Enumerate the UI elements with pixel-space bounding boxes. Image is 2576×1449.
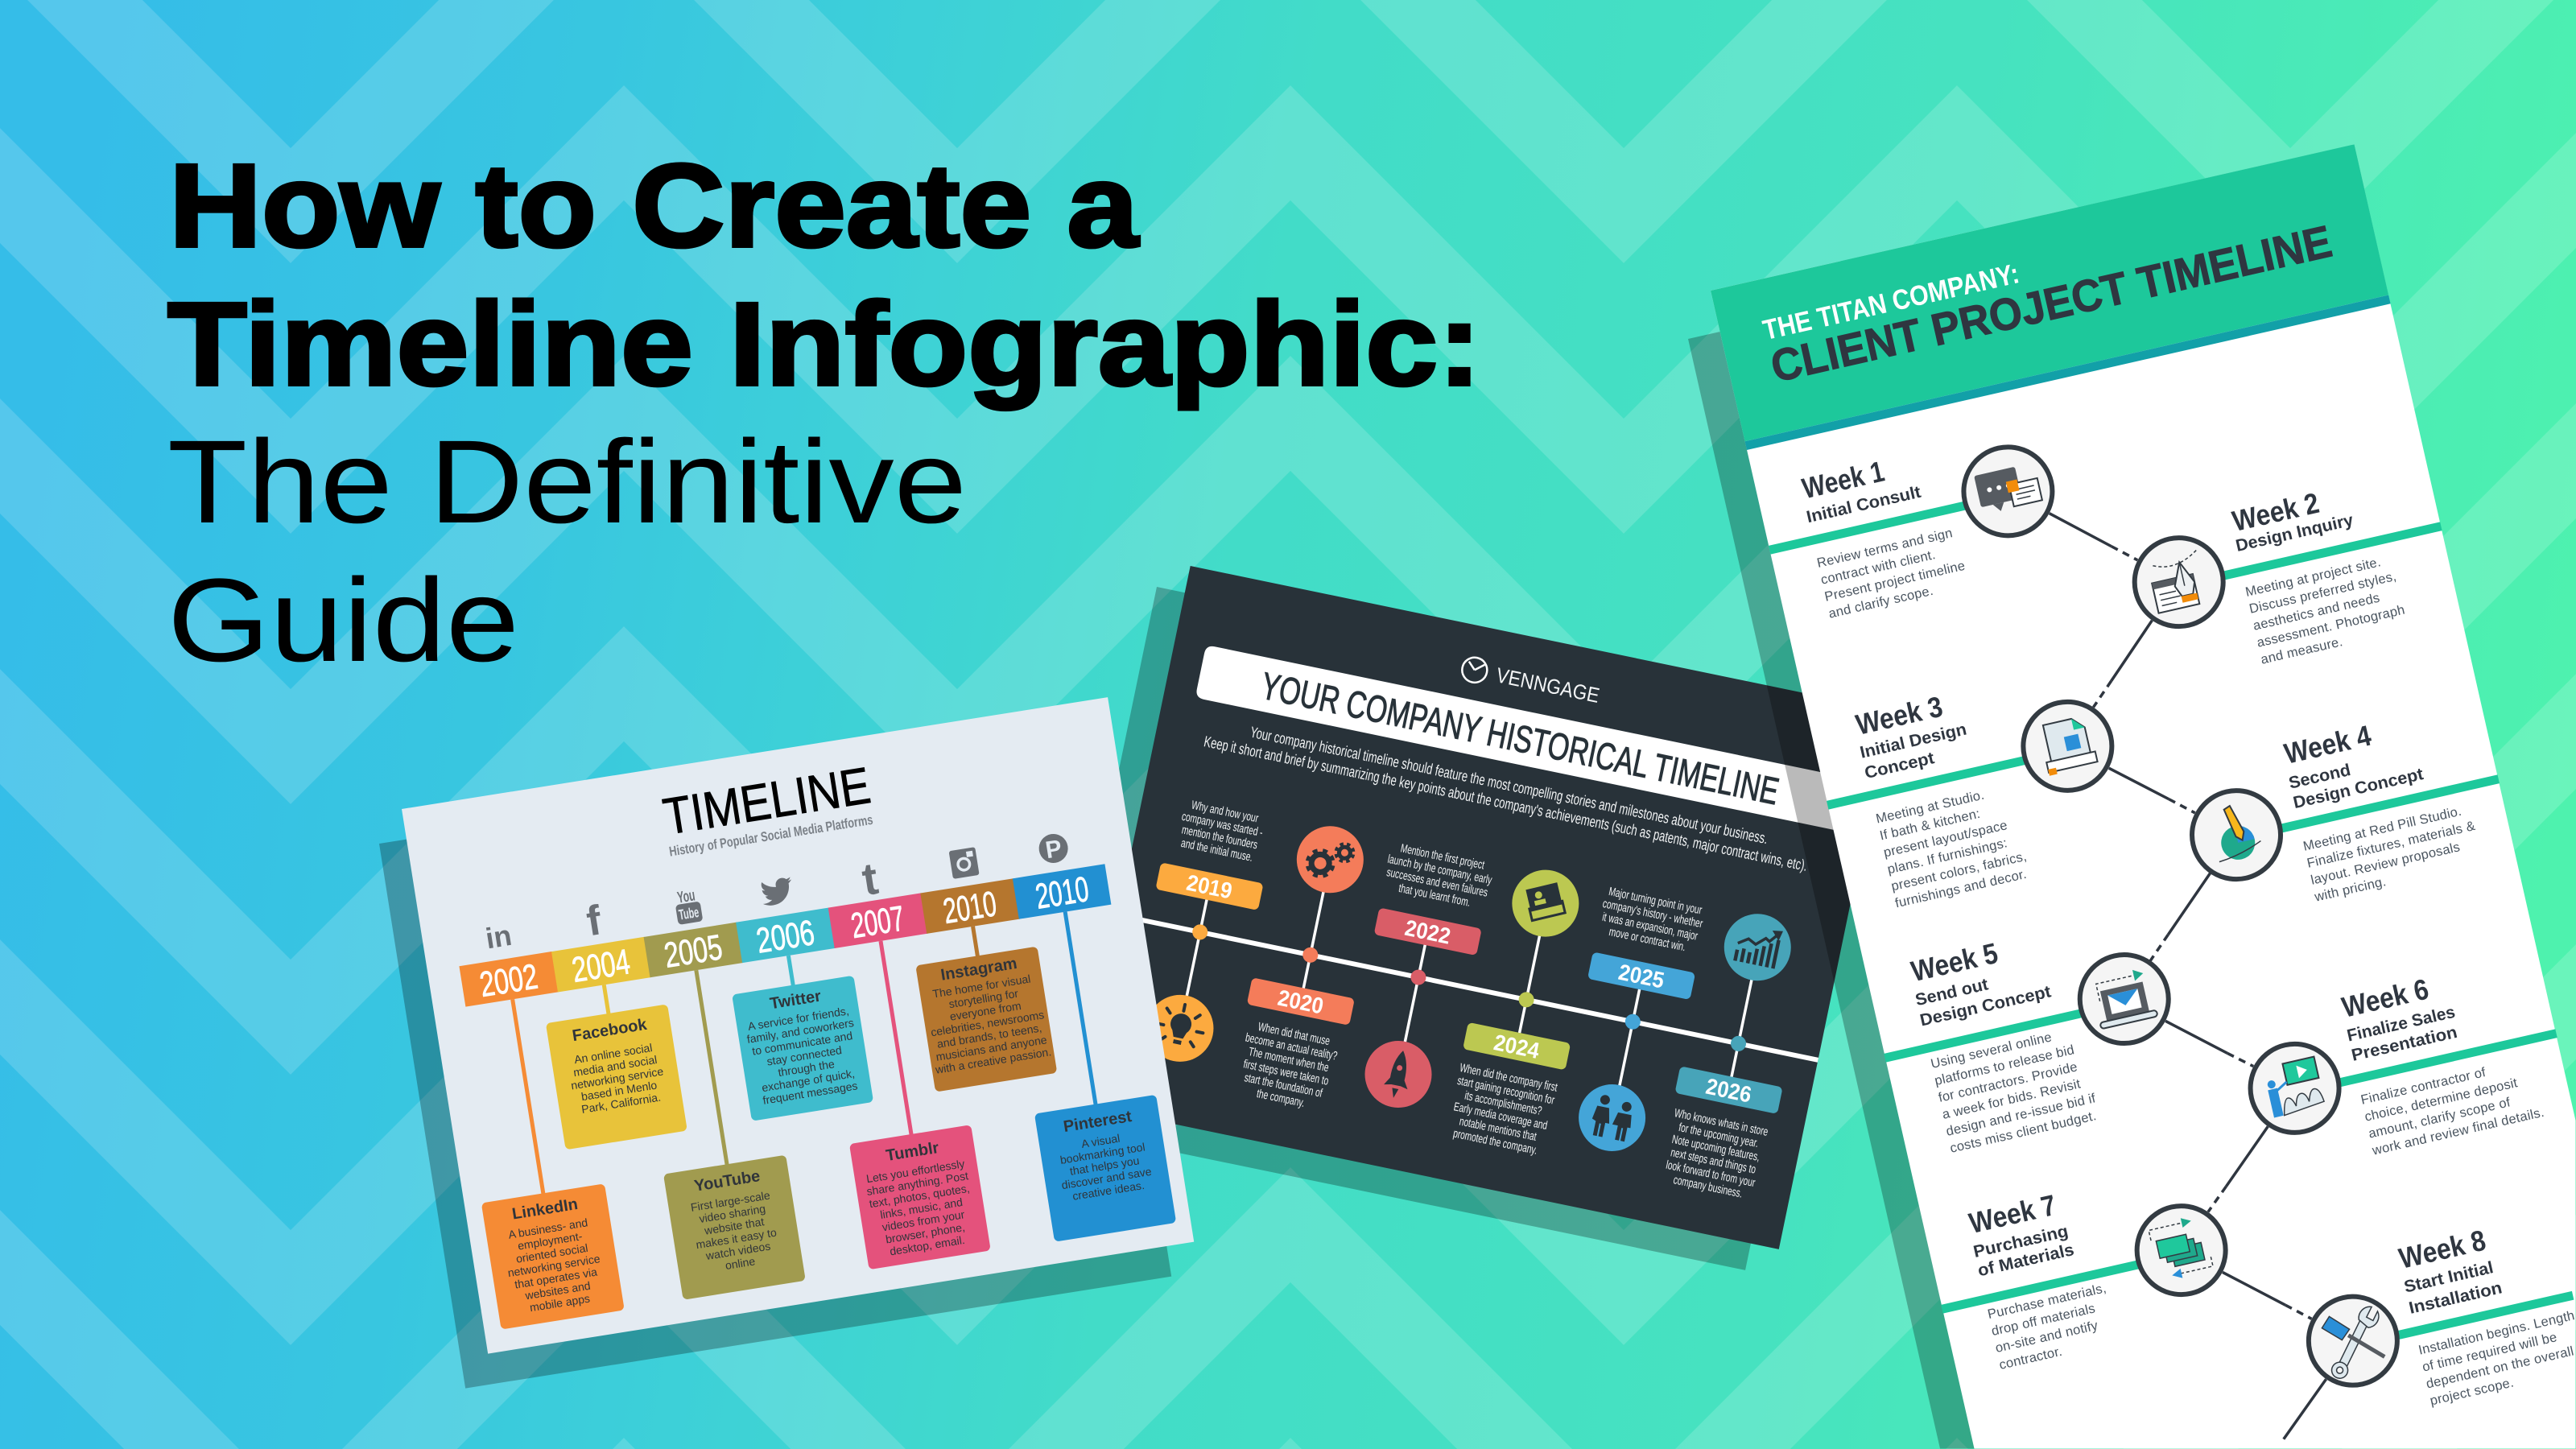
milestone 2026: look forward to from your	[1665, 1158, 1757, 1190]
week 5	[1864, 902, 2193, 1166]
week 5: Send out	[1913, 975, 1990, 1009]
icon: Pinterest: P	[1043, 836, 1063, 864]
card: Instagram: everyone from	[949, 999, 1022, 1023]
week 7	[1922, 1154, 2242, 1382]
card: YouTube: First large-scale	[690, 1188, 771, 1214]
week 4: Design Concept	[2292, 765, 2425, 812]
week 7: of Materials	[1976, 1241, 2076, 1280]
milestone 2026: Who knows whats in store	[1674, 1105, 1769, 1138]
card: Tumblr: share anything. Post	[865, 1169, 969, 1198]
title bar	[1195, 645, 1876, 836]
week 3: Concept	[1863, 749, 1936, 782]
week 5: Week 5	[1908, 936, 2001, 988]
week 3: furnishings and decor.	[1893, 867, 2028, 910]
milestone 2020: first steps were taken to	[1242, 1056, 1330, 1088]
milestone 2019: mention the founders	[1181, 822, 1259, 852]
week 8: Installation begins. Length	[2417, 1308, 2576, 1358]
week 3: Meeting at Studio.	[1875, 788, 1986, 827]
panel shadow: social media timeline	[379, 732, 1171, 1389]
year bar: 2010	[1033, 869, 1092, 917]
card: YouTube: website that	[703, 1215, 765, 1237]
card: Facebook: based in Menlo	[580, 1078, 658, 1103]
card: Tumblr: desktop, email.	[889, 1233, 966, 1257]
title: TIMELINE	[659, 756, 874, 846]
card: Instagram: storytelling for	[947, 987, 1019, 1010]
icon: pencil and color wheel	[2183, 782, 2289, 888]
card: Tumblr: links, music, and	[879, 1195, 964, 1221]
year bar: 2006	[753, 913, 817, 961]
week 1: Initial Consult	[1805, 483, 1922, 526]
year bar: 2004	[569, 942, 633, 990]
week 4	[2174, 693, 2516, 928]
week 2: assessment. Photograph	[2256, 603, 2406, 650]
icon: money stack	[2128, 1197, 2234, 1303]
week 6: Week 6	[2339, 972, 2432, 1024]
week 4: with pricing.	[2313, 874, 2388, 905]
panel: social media timeline	[402, 697, 1194, 1354]
week 3	[1808, 654, 2138, 921]
icon: light bulb	[1141, 989, 1220, 1067]
icon: pen tool	[2126, 529, 2232, 635]
week 8	[2291, 1208, 2576, 1432]
card: Facebook: Facebook	[571, 1016, 649, 1045]
week 7: drop off materials	[1990, 1301, 2097, 1339]
year bar: 2005	[662, 927, 725, 976]
icon: growth chart	[1718, 908, 1797, 987]
card: LinkedIn: websites and	[523, 1279, 592, 1302]
milestone 2019: Why and how your	[1191, 798, 1260, 825]
icon: Instagram	[949, 847, 980, 879]
card: Facebook: Park, California.	[580, 1091, 662, 1116]
week 4: Meeting at Red Pill Studio.	[2301, 804, 2463, 854]
card: Pinterest: A visual	[1080, 1132, 1121, 1150]
card: Pinterest: bookmarking tool	[1059, 1140, 1146, 1166]
heading: The Definitive	[167, 416, 967, 548]
milestone 2025: company's history - whether	[1601, 896, 1704, 931]
icon: presenter and audience	[2242, 1035, 2347, 1141]
milestone 2019: 2019	[1184, 870, 1234, 904]
milestone 2026: 2026	[1703, 1074, 1753, 1108]
milestone 2026: company business.	[1672, 1172, 1744, 1200]
week 4: Week 4	[2281, 719, 2374, 770]
week 8: of time required will be	[2421, 1330, 2558, 1375]
week 3: Initial Design	[1858, 720, 1968, 762]
heading: How to Create a	[169, 140, 1139, 272]
icon: documents	[1506, 864, 1585, 943]
week 2: Week 2	[2229, 486, 2322, 538]
card: Twitter: through the	[777, 1057, 836, 1079]
week 4: Finalize fixtures, materials &	[2306, 819, 2477, 871]
icon: Tumblr: t	[859, 852, 881, 905]
milestone 2024: When did the company first	[1459, 1060, 1559, 1094]
milestone 2020: become an actual reality?	[1245, 1030, 1339, 1063]
card: Tumblr: text, photos, quotes,	[869, 1182, 971, 1210]
week 5: costs miss client budget.	[1949, 1108, 2098, 1156]
card: Pinterest: discover and save	[1061, 1165, 1153, 1191]
week 8: Start Initial	[2402, 1258, 2496, 1297]
milestone 2022: 2022	[1403, 915, 1453, 949]
milestone 2025: move or contract win.	[1608, 924, 1687, 954]
icon: Twitter	[759, 877, 795, 906]
card: Facebook	[541, 976, 687, 1150]
week 6: amount, clarify scope of	[2367, 1095, 2512, 1141]
week 6	[2233, 947, 2574, 1182]
icon: YouTube: You	[676, 886, 696, 907]
card: LinkedIn: oriented social	[515, 1241, 588, 1265]
week 8: project scope.	[2429, 1375, 2515, 1409]
week 7: contractor.	[1998, 1344, 2064, 1373]
milestone 2026: for the upcoming year.	[1678, 1120, 1760, 1150]
card: LinkedIn: networking service	[507, 1252, 601, 1279]
icon: two people	[1573, 1078, 1652, 1158]
card: YouTube: makes it easy to	[695, 1226, 778, 1251]
header band: CLIENT PROJECT TIMELINE	[1766, 216, 2336, 392]
week 8: Week 8	[2396, 1224, 2489, 1275]
card: YouTube: video sharing	[698, 1202, 766, 1225]
week 1: and clarify scope.	[1827, 584, 1934, 621]
year bar	[459, 864, 1112, 1008]
milestone 2024: start gaining recognition for	[1456, 1073, 1556, 1107]
week 2: and measure.	[2260, 634, 2344, 667]
card: Instagram: The home for visual	[931, 972, 1031, 1001]
card: YouTube: YouTube	[693, 1167, 762, 1195]
milestone 2024: its accomplishments?	[1463, 1088, 1543, 1118]
week 7: Purchasing	[1971, 1222, 2070, 1261]
milestone 2022: that you learnt from.	[1397, 881, 1472, 909]
week 3: plans. If furnishings:	[1886, 836, 2008, 877]
panel: client project timeline	[1711, 144, 2576, 1449]
card: YouTube: watch videos	[704, 1240, 771, 1262]
milestone 2020: start the foundation of	[1243, 1070, 1324, 1100]
card: Twitter: exchange of quick,	[761, 1067, 856, 1094]
logo: Venngage	[1459, 655, 1602, 708]
week 7: Purchase materials,	[1986, 1281, 2107, 1322]
week 3: present layout/space	[1882, 818, 2008, 860]
week 5: platforms to release bid	[1934, 1042, 2076, 1088]
week 2	[2122, 460, 2462, 691]
card: Twitter: to communicate and	[751, 1029, 853, 1058]
week 1: Present project timeline	[1823, 559, 1967, 605]
week 5: for contractors. Provide	[1937, 1059, 2079, 1105]
card: Pinterest: that helps you	[1069, 1154, 1140, 1178]
header band: THE TITAN COMPANY:	[1760, 258, 2022, 346]
icon: Facebook: f	[584, 897, 605, 945]
icon: rocket	[1359, 1034, 1438, 1114]
card: Twitter: family, and coworkers	[746, 1016, 855, 1046]
milestone 2024: notable mentions that	[1458, 1113, 1538, 1144]
year bar: 2010	[940, 884, 999, 931]
week 1: Review terms and sign	[1815, 526, 1954, 571]
milestone 2020	[1228, 816, 1388, 1116]
week 5: a week for bids. Revisit	[1941, 1076, 2082, 1122]
milestone 2025: 2025	[1616, 960, 1666, 993]
week 6: Presentation	[2350, 1023, 2459, 1065]
week 1	[1754, 419, 2070, 631]
milestone 2026: next steps and things to	[1670, 1145, 1757, 1176]
card: Facebook: networking service	[570, 1064, 664, 1092]
header band	[1711, 144, 2391, 450]
week 5: design and re-issue bid if	[1945, 1091, 2097, 1139]
week 3: present colors, fabrics,	[1890, 849, 2028, 894]
week 6: Finalize contractor of	[2359, 1065, 2487, 1108]
card: Tumblr: browser, phone,	[885, 1220, 966, 1245]
card: Facebook: An online social	[573, 1041, 653, 1066]
week 2: aesthetics and needs	[2252, 591, 2381, 634]
card: Twitter: Twitter	[769, 987, 823, 1013]
card: LinkedIn: LinkedIn	[511, 1195, 579, 1224]
icon: Pinterest	[1037, 832, 1070, 865]
year bar: 2007	[848, 898, 907, 946]
timeline axis	[1118, 915, 1818, 1060]
week 1: Week 1	[1799, 454, 1887, 505]
week 7: Week 7	[1966, 1188, 2059, 1240]
milestone 2020: The moment when the	[1248, 1044, 1330, 1075]
milestone 2020: the company.	[1256, 1086, 1306, 1109]
milestone 2022	[1339, 839, 1496, 1117]
week 7: on-site and notify	[1994, 1319, 2099, 1356]
icon: YouTube: Tube	[678, 904, 700, 923]
milestone 2026	[1656, 904, 1816, 1204]
week 3: Week 3	[1853, 690, 1946, 741]
card: Instagram: and brands, to teens,	[936, 1021, 1042, 1051]
week 8: Installation	[2407, 1278, 2504, 1318]
intro text: Keep it short and brief by summarizing the key points about the company's achievements (such as patents, major contract wins, etc).	[1203, 733, 1809, 875]
milestone 2022: launch by the company, early	[1386, 852, 1493, 887]
milestone 2025: Major turning point in your	[1608, 884, 1703, 917]
title bar: YOUR COMPANY HISTORICAL TIMELINE	[1257, 664, 1782, 812]
icon: LinkedIn: in	[483, 919, 514, 955]
card: Instagram: Instagram	[939, 955, 1018, 985]
card: LinkedIn: that operates via	[514, 1265, 598, 1291]
card: Twitter: A service for friends,	[747, 1004, 850, 1033]
week 8: dependent on the overall	[2425, 1344, 2575, 1392]
milestone 2024: Early media coverage and	[1452, 1099, 1549, 1133]
card: LinkedIn: mobile apps	[529, 1292, 591, 1314]
milestone 2026: Note upcoming features,	[1671, 1132, 1761, 1164]
card: LinkedIn: employment-	[517, 1229, 584, 1253]
icon: YouTube	[673, 886, 703, 925]
card: Instagram: musicians and anyone	[935, 1033, 1048, 1063]
week 1: contract with client.	[1819, 547, 1937, 588]
card: Pinterest: creative ideas.	[1071, 1179, 1146, 1203]
card: YouTube: online	[724, 1254, 756, 1272]
milestone 2020: When did that muse	[1257, 1019, 1331, 1048]
heading	[167, 140, 1481, 687]
milestone 2022: Mention the first project	[1399, 840, 1486, 872]
milestone 2019: and the initial muse.	[1180, 836, 1254, 864]
heading: Timeline Infographic:	[167, 279, 1481, 411]
card: LinkedIn: A business- and	[507, 1216, 588, 1241]
milestone 2019	[1122, 794, 1278, 1071]
icon: gears	[1290, 820, 1369, 899]
card: YouTube	[633, 961, 806, 1300]
week 3: If bath & kitchen:	[1878, 807, 1982, 844]
icon: document and ruler	[2015, 693, 2120, 799]
card: Instagram: with a creative passion.	[934, 1045, 1052, 1076]
week 5: Design Concept	[1918, 982, 2053, 1030]
week 6: choice, determine deposit	[2363, 1075, 2519, 1125]
dashed connectors between weeks	[2049, 496, 2337, 1444]
milestone 2025: it was an expansion, major	[1601, 910, 1699, 943]
week 2: Meeting at project site.	[2244, 555, 2382, 600]
icon: laptop with email	[2071, 946, 2178, 1052]
week 4: Second	[2287, 761, 2352, 793]
intro text	[1203, 716, 1813, 875]
card: Twitter: stay connected	[766, 1043, 843, 1068]
panel: company historical timeline	[1079, 566, 1890, 1249]
panel shadow: company timeline	[1045, 587, 1857, 1270]
week 2: Design Inquiry	[2234, 511, 2355, 555]
milestone 2022: successes and even failures	[1385, 865, 1489, 899]
milestone 2025	[1554, 883, 1710, 1161]
milestone 2020: 2020	[1276, 985, 1326, 1018]
card: Pinterest	[1004, 902, 1176, 1242]
icon: screwdriver and wrench	[2300, 1288, 2406, 1393]
card: Twitter	[727, 946, 873, 1121]
card: Instagram: celebrities, newsrooms	[930, 1008, 1045, 1038]
week 2: Discuss preferred styles,	[2248, 569, 2398, 617]
icon: chat windows	[1955, 439, 2061, 544]
week 5: Using several online	[1930, 1030, 2054, 1071]
card: Tumblr	[819, 931, 991, 1269]
card: Tumblr: Lets you effortlessly	[865, 1157, 965, 1185]
card: Instagram	[911, 917, 1057, 1092]
week 4: layout. Review proposals	[2310, 840, 2462, 888]
week 6: Finalize Sales	[2345, 1003, 2457, 1046]
milestone 2024	[1444, 861, 1604, 1159]
card: Tumblr: Tumblr	[885, 1139, 940, 1165]
heading: Guide	[167, 555, 519, 687]
logo: Venngage: VENNGAGE	[1494, 663, 1602, 708]
card: Facebook: media and social	[572, 1053, 658, 1079]
milestone 2024: promoted the company.	[1452, 1126, 1538, 1157]
intro text: Your company historical timeline should feature the most compelling stories and milestones about your business.	[1249, 724, 1769, 848]
milestone 2024: 2024	[1492, 1030, 1542, 1063]
milestone 2019: company was started -	[1181, 809, 1264, 840]
panel shadow: client project timeline	[1688, 193, 2383, 1449]
week 6: work and review final details.	[2370, 1105, 2545, 1158]
title: History of Popular Social Media Platforms	[668, 812, 874, 860]
card: Pinterest: Pinterest	[1062, 1108, 1133, 1136]
card: Tumblr: videos from your	[881, 1208, 966, 1233]
card: Twitter: frequent messages	[762, 1079, 858, 1107]
card: LinkedIn	[451, 989, 625, 1330]
year bar: 2002	[477, 956, 540, 1005]
